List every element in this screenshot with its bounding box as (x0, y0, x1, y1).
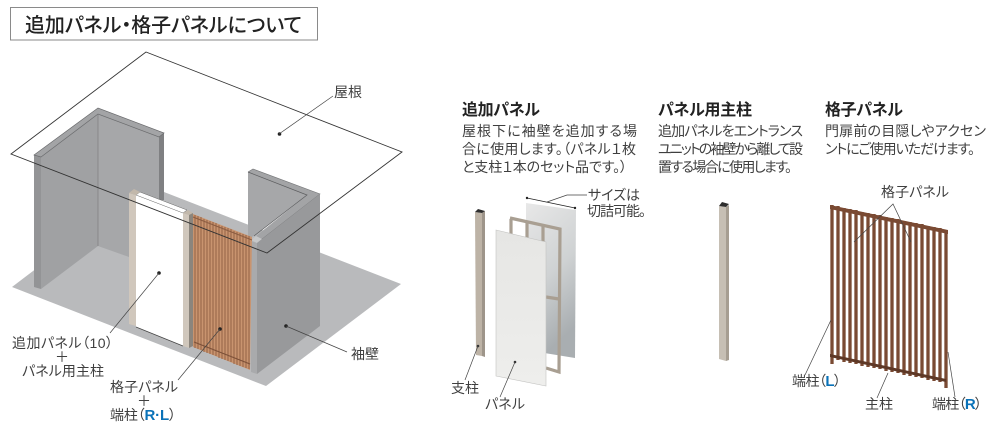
label: panel (485, 361, 525, 412)
label: post: 支柱 (451, 380, 479, 396)
label: end post R (932, 352, 982, 413)
section: lattice panel description: 門扉前の目隠しやアクセン (825, 123, 986, 139)
label: lattice panel plus end posts: 端柱（R·L） (110, 407, 176, 424)
label: lattice panel plus end posts: ＋ (137, 393, 151, 409)
section: main post description: パネル用主柱 (658, 100, 752, 119)
floor (12, 185, 401, 386)
right sleeve wall (248, 169, 320, 374)
label: added panel plus main post (12, 271, 161, 379)
label: added panel plus main post: パネル用主柱 (22, 363, 104, 379)
left sleeve wall (34, 108, 164, 289)
label: sleeve wall (284, 324, 379, 362)
label: lattice panel plus end posts (110, 327, 222, 424)
section: added panel description: 合に使用します。（パネル１枚 (462, 141, 636, 157)
label: size can be cut: 切詰可能。 (587, 203, 646, 219)
label: lattice panel plus end posts: 格子パネル (110, 379, 178, 395)
section: added panel description (462, 101, 637, 175)
label: panel: パネル (485, 396, 525, 412)
section: added panel description: 追加パネル (462, 101, 540, 119)
label: roof (278, 84, 362, 136)
exploded view: post (475, 209, 485, 357)
label: main post (865, 373, 893, 412)
title (10, 8, 318, 40)
section: main post description: 追加パネルをエントランス (658, 123, 803, 139)
label: added panel plus main post: ＋ (55, 349, 69, 365)
added panel with posts (129, 189, 193, 348)
label: size can be cut: サイズは (588, 187, 640, 203)
label: end post L (792, 320, 841, 390)
label: added panel plus main post: 追加パネル（10） (12, 335, 113, 351)
exploded view: front panel (496, 230, 546, 386)
section: added panel description: 屋根下に袖壁を追加する場 (462, 123, 637, 139)
label: end post L: 端柱（L） (792, 373, 841, 390)
section: main post description: ユニットの袖壁から離して設 (658, 141, 803, 157)
main post illustration (719, 202, 729, 361)
exploded view: back panel (526, 203, 576, 358)
title: 追加パネル・格子パネルについて (25, 14, 302, 37)
label: lattice panel callout: 格子パネル (881, 184, 949, 200)
section: main post description (658, 100, 803, 175)
section: lattice panel description: 格子パネル (825, 100, 903, 119)
label: lattice panel callout (854, 184, 949, 242)
exploded view: frame (510, 218, 560, 372)
lattice panel (193, 214, 252, 370)
section: lattice panel description (825, 100, 986, 157)
label: main post: 主柱 (865, 396, 893, 412)
section: added panel description: と支柱１本のセット品です。） (462, 159, 627, 175)
label: sleeve wall: 袖壁 (351, 346, 379, 362)
label: size can be cut (526, 187, 646, 219)
illustration: entrance unit with added panel and lattice panel (11, 52, 402, 386)
lattice panel illustration (830, 205, 948, 388)
section: lattice panel description: ントにご使用いただけます。 (825, 141, 975, 157)
roof outline (11, 52, 402, 253)
label: roof: 屋根 (334, 84, 362, 100)
section: main post description: 置する場合に使用します。 (658, 159, 792, 175)
label: end post R: 端柱（R） (932, 396, 982, 413)
label: post (451, 345, 479, 396)
